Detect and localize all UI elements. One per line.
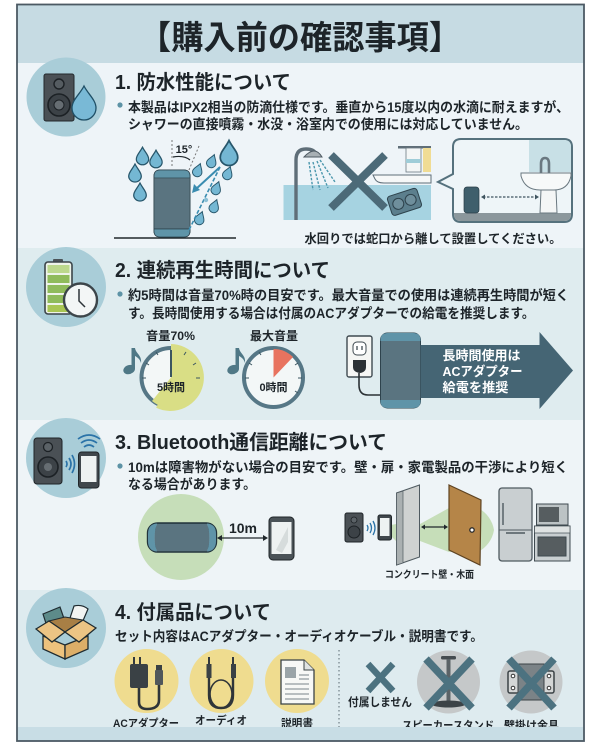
not included: wall mount: 壁掛け金具 <box>504 718 559 732</box>
illustration: 10m range between speaker and phone <box>138 494 294 580</box>
arrow: AC adapter recommended: ACアダプター <box>442 364 522 379</box>
not included mark <box>348 664 412 709</box>
panel: section 4 background <box>17 590 584 741</box>
caption: keep away from faucets: 水回りでは蛇口から離して設置してください。 <box>304 231 562 246</box>
section 2 heading: 2. 連続再生時間について <box>115 258 330 282</box>
illustration: outlet, plug and speaker <box>347 333 420 408</box>
illustration: 10m range between speaker and phone: 10m <box>229 520 257 536</box>
title band <box>17 5 584 63</box>
accessory: audio cable: オーディオ <box>195 713 247 727</box>
panel: section 3 background <box>17 420 584 590</box>
clock: maximum volume, 0 hours: 最大音量 <box>250 328 298 343</box>
bottom band <box>18 727 583 741</box>
section 3 body text: なる場合があります。 <box>128 476 256 492</box>
illustration: signal blocked by wall, door and appliances <box>345 485 570 565</box>
section 3 heading: 3. Bluetooth通信距離について <box>115 431 387 454</box>
section 3 icon: speaker, phone and wireless signal <box>26 418 106 498</box>
section 2 icon: battery and clock <box>26 247 106 327</box>
panel: section 2 background <box>17 248 584 420</box>
clock: volume 70 percent, 5 hours: 5時間 <box>157 380 185 394</box>
clock: maximum volume, 0 hours: 0時間 <box>259 380 288 394</box>
accessory: manual: 説明書 <box>281 716 313 730</box>
clock: volume 70 percent, 5 hours <box>123 328 202 409</box>
clock: maximum volume, 0 hours <box>227 328 303 407</box>
section 2 body text <box>117 287 569 321</box>
section 1 icon: speaker and water drop <box>26 58 106 136</box>
accessory: manual <box>265 649 329 730</box>
not included mark: 付属しません <box>348 695 412 709</box>
not included: speaker stand: スピーカースタンド <box>402 719 494 732</box>
illustration: speech bubble with sink and safe distance <box>438 139 572 222</box>
accessory: AC adapter <box>113 649 179 730</box>
section 4 icon: open cardboard box <box>26 588 106 668</box>
arrow: AC adapter recommended <box>420 332 573 409</box>
section 3 body text <box>117 459 568 492</box>
accessory: AC adapter: ACアダプター <box>113 716 179 730</box>
section 1 body text <box>117 99 569 132</box>
arrow: AC adapter recommended: 給電を推奨 <box>442 380 508 395</box>
arrow: AC adapter recommended: 長時間使用は <box>442 348 520 363</box>
section 1 body text: 本製品はIPX2相当の防滴仕様です。垂直から15度以内の水滴に耐えますが、 <box>128 99 569 115</box>
not included: speaker stand <box>402 650 494 732</box>
section 4 heading: 4. 付属品について <box>115 601 271 624</box>
clock: volume 70 percent, 5 hours: 音量70% <box>146 328 195 343</box>
illustration: drip-proof speaker with 15 degree angle: 15° <box>176 144 192 156</box>
illustration: shower and submerged speaker crossed out <box>284 146 431 220</box>
illustration: drip-proof speaker with 15 degree angle <box>114 140 238 238</box>
accessory: audio cable <box>190 649 254 727</box>
section 3 body text: 10mは障害物がない場合の目安です。壁・扉・家電製品の干渉により短く <box>128 459 568 475</box>
title: 【購入前の確認事項】 <box>139 19 461 56</box>
caption: concrete wall and wood: コンクリート壁・木面 <box>385 568 474 581</box>
panel: section 1 background <box>17 63 584 248</box>
section 2 body text: す。長時間使用する場合は付属のACアダプターでの給電を推奨します。 <box>128 305 534 321</box>
not included: wall mount <box>500 650 562 732</box>
section 1 heading: 1. 防水性能について <box>115 71 291 94</box>
section 1 body text: シャワーの直接噴霧・水没・浴室内での使用には対応していません。 <box>128 116 528 132</box>
section 2 body text: 約5時間は音量70%時の目安です。最大音量での使用は連続再生時間が短く <box>128 287 569 303</box>
section 4 body text: セット内容はACアダプター・オーディオケーブル・説明書です。 <box>115 628 483 644</box>
